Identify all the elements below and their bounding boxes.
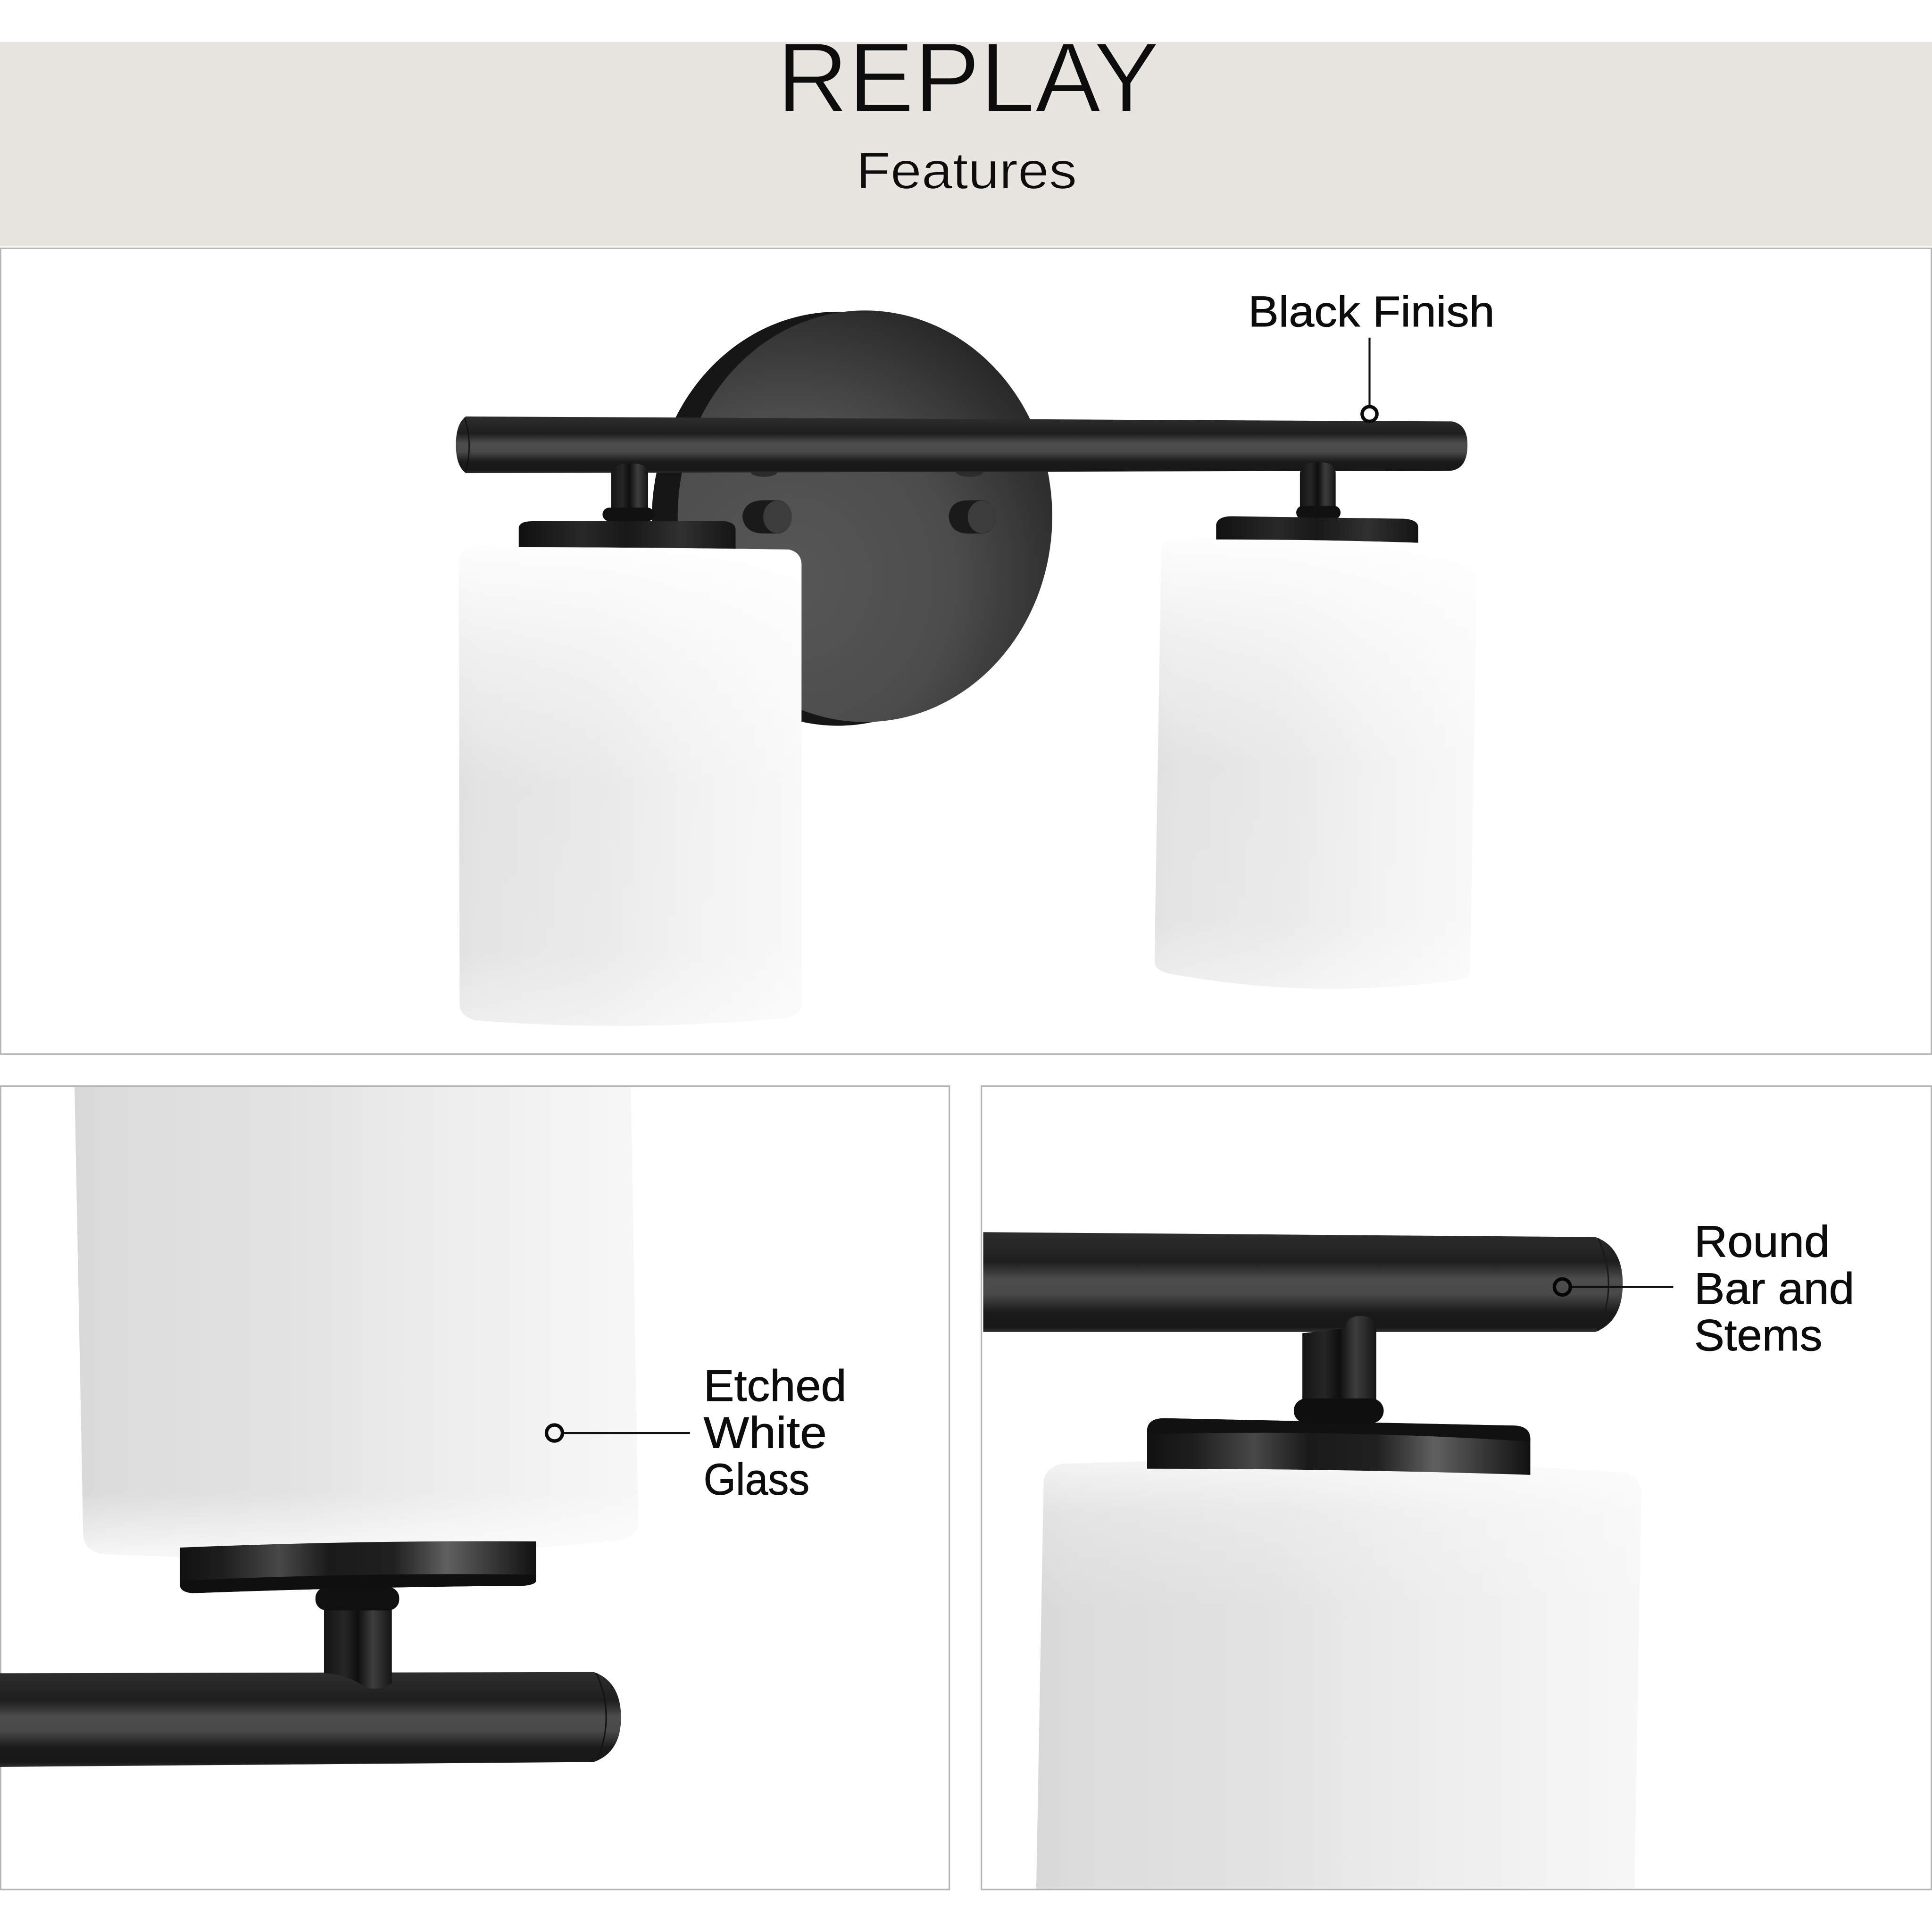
right cap [1216,516,1418,547]
label: etched white glass: Glass [704,1455,809,1504]
right glass shade [1155,540,1477,989]
stem closeup [1294,1316,1384,1423]
right stem [1296,462,1341,519]
label: etched white glass [704,1361,847,1504]
title: REPLAY [777,22,1159,133]
label: round bar and stems: Bar and [1694,1264,1854,1313]
callout: round bar and stems [1554,1216,1854,1360]
label: etched white glass: White [704,1407,827,1457]
left cap [519,521,736,551]
glass shade closeup [1036,1460,1641,1889]
label: etched white glass: Etched [704,1361,847,1410]
header band [0,22,1932,246]
callout: etched white glass [547,1361,847,1504]
label: black finish: Black Finish [1248,288,1495,336]
round bar [456,416,1467,473]
wall backplate [652,310,1052,726]
label: round bar and stems: Round [1694,1216,1830,1266]
stem closeup [316,1587,399,1689]
subtitle: Features [857,142,1077,200]
left stem [602,463,654,521]
cap closeup [1147,1418,1530,1475]
panel: etched white glass detail [0,1086,949,1890]
left glass shade [459,547,801,1026]
cap closeup [180,1541,536,1593]
label: round bar and stems: Stems [1694,1310,1823,1360]
bar closeup [0,1672,621,1767]
glass shade closeup [75,1087,638,1558]
panel: full fixture [0,248,1932,1054]
bar closeup [983,1232,1623,1332]
label: round bar and stems [1694,1216,1854,1360]
callout: black finish [1248,288,1495,421]
panel: round bar and stems detail [982,1086,1932,1890]
